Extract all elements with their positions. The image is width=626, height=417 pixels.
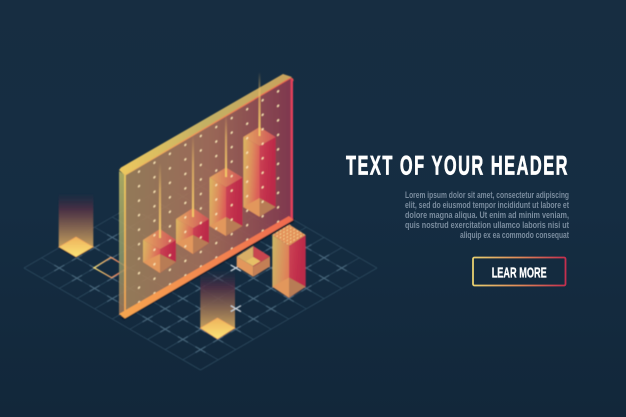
tall dotted bar: [272, 224, 306, 298]
small cube: [237, 246, 270, 277]
button: [473, 258, 566, 286]
bottom glowing column: [200, 270, 235, 339]
body paragraph: quis nostrud exercitation ullamco laboris nisi ut: [405, 220, 569, 230]
left glowing column: [59, 193, 93, 258]
bar 1: [143, 229, 176, 273]
illustration: [24, 72, 377, 370]
board bottom edge: [119, 216, 294, 318]
body paragraph: aliquip ex ea commodo consequat: [460, 230, 569, 240]
board right edge: [291, 79, 293, 220]
board top edge: [119, 74, 292, 176]
board front face: [125, 78, 293, 313]
white cross markers: [231, 265, 241, 312]
bar 2: [176, 208, 209, 254]
shadow under board: [120, 218, 294, 320]
diamond outline on floor: [94, 257, 128, 278]
isometric floor grid: [24, 166, 377, 370]
bar 3: [210, 168, 242, 236]
bar 4: [243, 127, 276, 217]
vertical lead lines: [159, 72, 260, 238]
board panel: [119, 72, 294, 318]
board left edge: [119, 171, 126, 315]
body paragraph: Lorem ipsum dolor sit amet, consectetur adipiscing: [405, 190, 569, 200]
body paragraph: [405, 190, 569, 240]
body paragraph: dolore magna aliqua. Ut enim ad minim veniam,: [405, 210, 569, 220]
dot matrix: [125, 79, 290, 311]
board top highlight: [125, 78, 293, 175]
body paragraph: elit, sed do eiusmod tempor incididunt ut labore et: [405, 200, 569, 210]
chart bars: [143, 72, 276, 273]
button: LEAR MORE: [492, 264, 547, 281]
